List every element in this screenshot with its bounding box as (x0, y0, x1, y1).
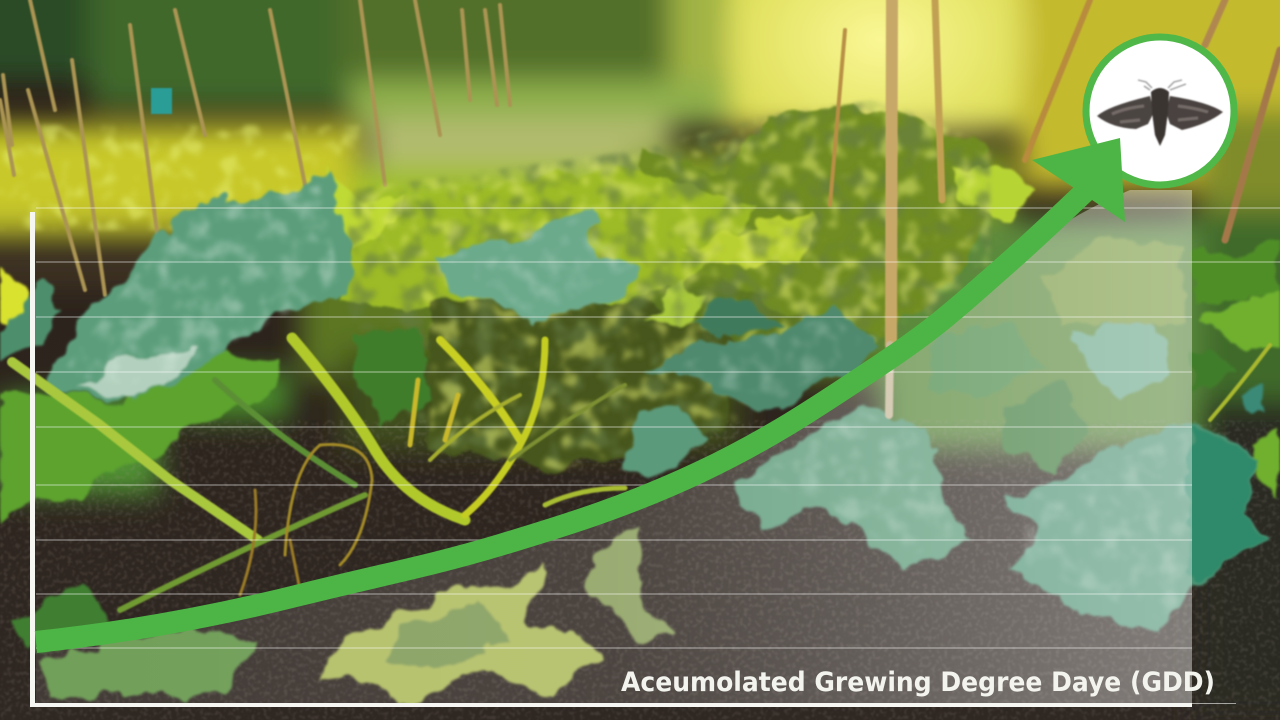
leaf: shaded centre right leaves (620, 295, 880, 480)
lower leaf mottling (445, 215, 1255, 620)
leaf mottling (60, 185, 340, 385)
moth badge (1086, 37, 1234, 185)
foliage highlights (350, 100, 990, 470)
dense central foliage (0, 105, 1038, 470)
trellis stakes (0, 0, 510, 295)
translucent area under curve (36, 190, 1192, 704)
foliage mottling (345, 100, 990, 470)
distant sunlight glow (710, 0, 1050, 170)
soil texture (0, 420, 1280, 720)
GDD growth arrow (36, 138, 1125, 642)
blue barrel in background (151, 88, 172, 114)
leaf: right foliage under veil (930, 235, 1185, 470)
leaf: bottom leaves (40, 520, 672, 705)
plant stems (12, 338, 1270, 610)
leaf: right lower leaves (735, 400, 1268, 632)
right stakes (830, 0, 1280, 415)
yellow hedge texture (0, 125, 360, 230)
icon: moth (1097, 80, 1223, 146)
leaf: central teal leaf (435, 205, 645, 328)
leaf: right edge green leaves (1192, 240, 1280, 585)
x-axis label: Aceumolated Grewing Degree Daye (GDD) (621, 667, 1215, 698)
chart axes (30, 212, 1236, 707)
chart grid lines (36, 208, 1280, 648)
leaf: large teal leaf (0, 170, 352, 400)
lower left green foliage (0, 330, 430, 660)
